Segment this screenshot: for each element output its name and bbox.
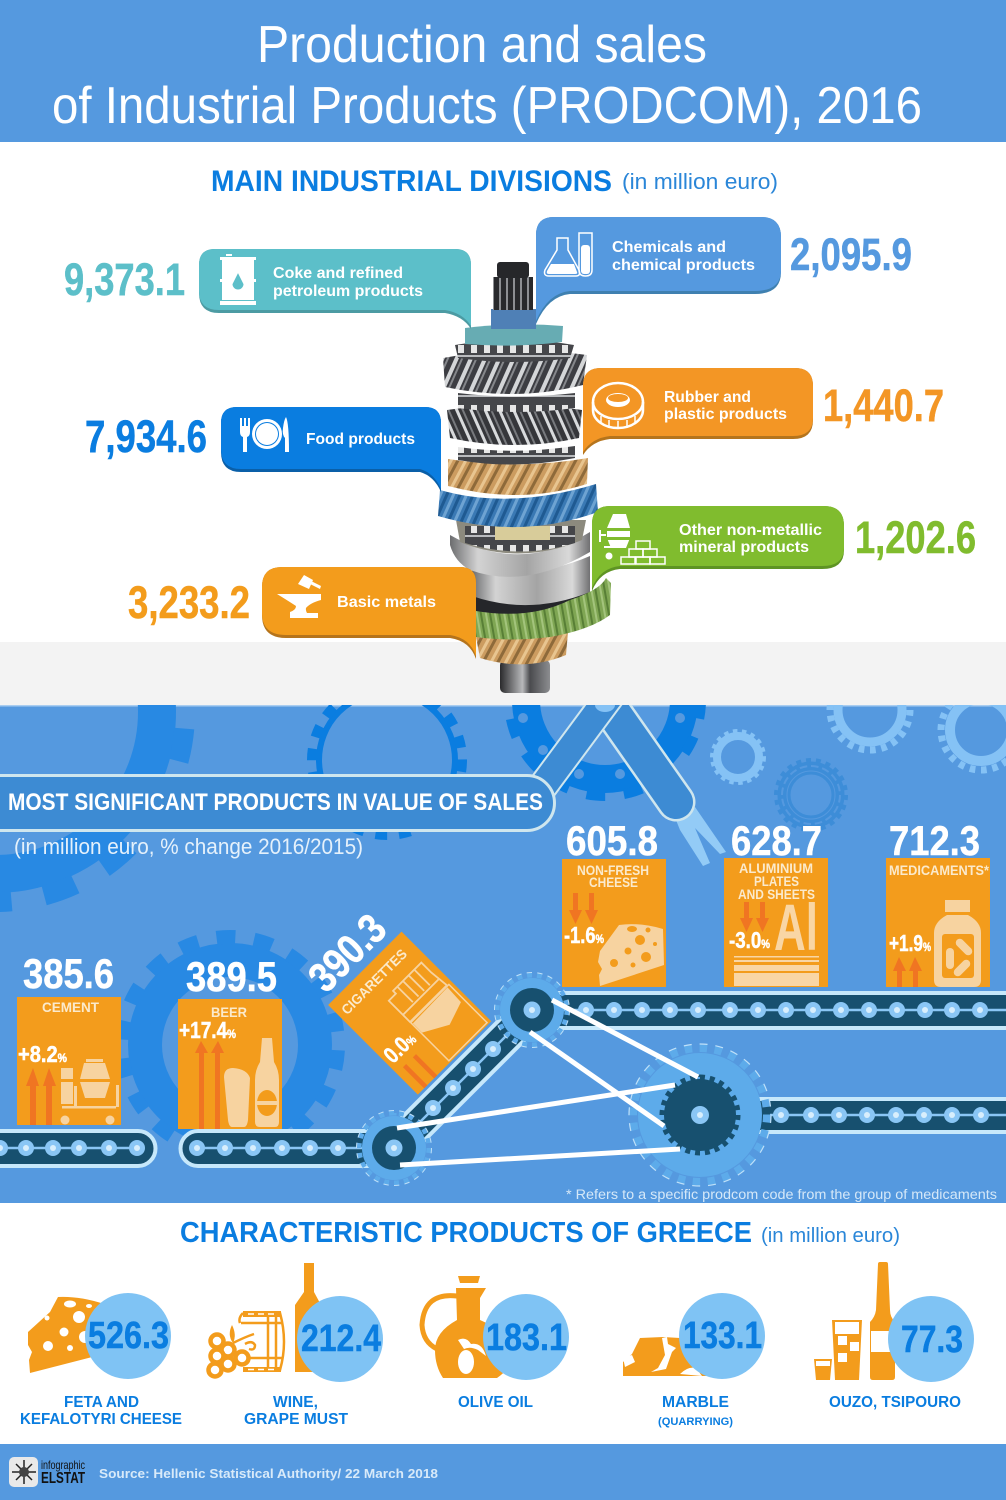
subheading: (in million euro, % change 2016/2015) bbox=[14, 834, 363, 859]
value circle bbox=[888, 1296, 974, 1382]
name: NON-FRESH bbox=[577, 862, 649, 878]
change: +8.2% bbox=[18, 1041, 67, 1067]
qualifier: (QUARRYING) bbox=[658, 1416, 733, 1428]
change: +1.9% bbox=[889, 930, 931, 956]
value: 183.1 bbox=[486, 1317, 567, 1359]
value: 605.8 bbox=[566, 817, 658, 864]
value: basic metals: 3,233.2 bbox=[128, 577, 250, 628]
label: Basic metals bbox=[337, 594, 436, 611]
product box: cigarettes bbox=[309, 914, 492, 1095]
label: Rubber and bbox=[664, 389, 751, 406]
icon: cheese wedge bbox=[28, 1297, 104, 1373]
product box: cement bbox=[17, 950, 121, 1125]
background gear: large top left bbox=[0, 705, 194, 912]
conveyor: left bbox=[0, 1131, 156, 1166]
name: GRAPE MUST bbox=[244, 1411, 348, 1428]
item: feta and kefalotyri cheese bbox=[20, 1293, 182, 1428]
conveyor: lower right bbox=[740, 1099, 1006, 1132]
title: of Industrial Products (PRODCOM), 2016 bbox=[52, 77, 922, 135]
background gear: outlined bbox=[776, 760, 846, 830]
banner heading: MOST SIGNIFICANT PRODUCTS IN VALUE OF SALES bbox=[8, 789, 543, 816]
label: Chemicals and bbox=[612, 239, 726, 256]
logo bbox=[9, 1457, 38, 1487]
icon: aluminium symbol and sheets bbox=[734, 890, 819, 986]
value: 526.3 bbox=[88, 1315, 169, 1357]
heading: characteristic products: (in million euro) bbox=[761, 1225, 900, 1247]
name: ALUMINIUM bbox=[739, 860, 813, 876]
name: OLIVE OIL bbox=[458, 1394, 533, 1411]
name: CEMENT bbox=[42, 999, 99, 1015]
background gear: behind robot arm bbox=[506, 705, 706, 801]
value: 389.5 bbox=[186, 953, 277, 1000]
logo text bbox=[41, 1458, 85, 1487]
value: coke: 9,373.1 bbox=[64, 254, 185, 305]
item: marble bbox=[623, 1293, 765, 1428]
icon: concrete mixer bbox=[60, 1059, 119, 1124]
title: Production and sales bbox=[257, 16, 707, 74]
label: chemical products bbox=[612, 257, 755, 274]
icon: rubber ring bbox=[593, 383, 643, 428]
arrows up bbox=[26, 1068, 56, 1125]
name: MARBLE bbox=[662, 1394, 729, 1411]
icon: bottle, barrel, grapes bbox=[208, 1263, 321, 1376]
icon: cheese bbox=[598, 924, 664, 986]
value: 212.4 bbox=[301, 1318, 381, 1360]
value circle bbox=[85, 1293, 171, 1379]
arrows up bbox=[893, 957, 922, 987]
grey floor strip bbox=[0, 642, 1006, 705]
gear shaft illustration bbox=[438, 262, 611, 693]
conveyor: middle bbox=[181, 1131, 394, 1166]
label: Coke and refined bbox=[273, 265, 403, 282]
value: 385.6 bbox=[23, 950, 114, 997]
label: Food products bbox=[306, 431, 415, 448]
product box: aluminium bbox=[724, 817, 828, 987]
background gear: top centre bbox=[312, 685, 462, 835]
icon: aluminium symbol and sheets: Al bbox=[774, 890, 818, 964]
item: ouzo, tsipouro bbox=[814, 1262, 974, 1411]
value circle bbox=[679, 1293, 765, 1379]
name: FETA AND bbox=[64, 1394, 139, 1411]
name: WINE, bbox=[273, 1394, 318, 1411]
logo text: infographic bbox=[41, 1458, 85, 1472]
item: olive oil bbox=[422, 1276, 569, 1411]
background gear: behind beer bbox=[116, 931, 344, 1159]
name: KEFALOTYRI CHEESE bbox=[20, 1411, 182, 1428]
callout: basic metals bbox=[262, 567, 476, 659]
banner heading bbox=[0, 775, 554, 830]
name: CHEESE bbox=[589, 874, 638, 890]
heading: main industrial divisions: MAIN INDUSTRIAL DIVISIONS bbox=[211, 165, 612, 198]
icon: robot claw bbox=[676, 807, 726, 866]
name: PLATES bbox=[754, 873, 799, 889]
icon: cigarette pack bbox=[386, 960, 487, 1061]
name: AND SHEETS bbox=[738, 886, 815, 902]
arrows neutral bbox=[403, 1054, 439, 1090]
heading: main industrial divisions: (in million euro) bbox=[622, 169, 778, 194]
arrows down bbox=[569, 893, 598, 924]
icon: mixer and bricks bbox=[600, 514, 665, 564]
conveyor: diagonal bbox=[400, 1016, 526, 1142]
icon: oil jug bbox=[422, 1276, 514, 1378]
pulley: lower left bbox=[356, 1110, 432, 1186]
label: Other non-metallic bbox=[679, 522, 822, 539]
label: petroleum products bbox=[273, 283, 423, 300]
panel: most significant products bbox=[0, 705, 1006, 1203]
icon: marble block bbox=[623, 1337, 710, 1376]
callout: coke and refined petroleum bbox=[199, 249, 471, 329]
footer band bbox=[0, 1444, 1006, 1500]
icon: pill bottle bbox=[934, 900, 981, 987]
heading: characteristic products: CHARACTERISTIC PRODUCTS OF GREECE bbox=[180, 1217, 752, 1249]
change: -3.0% bbox=[729, 927, 770, 953]
logo text: ELSTAT bbox=[41, 1470, 85, 1487]
conveyor: upper right bbox=[540, 993, 1006, 1028]
value: food: 7,934.6 bbox=[85, 411, 207, 462]
header band bbox=[0, 0, 1006, 142]
value: 390.3 bbox=[299, 905, 395, 1001]
change: 0.0% bbox=[378, 1025, 421, 1068]
source: Source: Hellenic Statistical Authority/ 22 March 2018 bbox=[99, 1466, 438, 1481]
product box: medicaments bbox=[886, 817, 990, 987]
icon: plate and cutlery bbox=[240, 417, 289, 452]
robot arm right bbox=[594, 685, 676, 802]
icon: anvil and hammer bbox=[277, 575, 321, 618]
change: -1.6% bbox=[564, 922, 604, 948]
name: BEER bbox=[211, 1004, 247, 1020]
footnote: * Refers to a specific prodcom code from the group of medicaments bbox=[566, 1187, 997, 1202]
robot arm pivot bbox=[595, 705, 615, 712]
label: mineral products bbox=[679, 539, 809, 556]
name: MEDICAMENTS* bbox=[889, 862, 990, 878]
arrows up bbox=[195, 1041, 224, 1129]
icon: flask and test tube bbox=[544, 233, 592, 276]
value: 628.7 bbox=[731, 817, 822, 864]
name: OUZO, TSIPOURO bbox=[829, 1394, 961, 1411]
arrows down bbox=[740, 902, 769, 932]
icon: bottle and glasses bbox=[814, 1262, 895, 1380]
change: +17.4% bbox=[179, 1017, 236, 1043]
value: rubber: 1,440.7 bbox=[823, 380, 944, 431]
icon: beer glass and bottle bbox=[224, 1038, 279, 1127]
value: 712.3 bbox=[889, 817, 980, 864]
background gear: top right bbox=[826, 705, 914, 754]
callout: other non-metallic bbox=[592, 506, 844, 591]
callout: chemicals bbox=[536, 217, 781, 324]
value circle bbox=[483, 1294, 569, 1380]
product box: non-fresh cheese bbox=[562, 817, 666, 987]
name: CIGARETTES bbox=[338, 946, 410, 1018]
large drive gear bbox=[629, 1044, 771, 1186]
icon: oil barrel bbox=[220, 254, 256, 305]
value: chemicals: 2,095.9 bbox=[790, 229, 912, 280]
drive belts bbox=[397, 1000, 698, 1165]
pulley: upper bbox=[494, 972, 570, 1048]
background gear: small light bbox=[712, 731, 764, 783]
item: wine, grape must bbox=[208, 1263, 383, 1428]
product box: beer bbox=[178, 953, 282, 1129]
value: 77.3 bbox=[901, 1319, 963, 1361]
callout: rubber and plastic bbox=[583, 368, 813, 455]
value circle bbox=[297, 1296, 383, 1382]
value: 133.1 bbox=[683, 1315, 762, 1357]
value: non-metallic: 1,202.6 bbox=[855, 512, 976, 563]
robot arm left bbox=[532, 705, 622, 796]
callout: food products bbox=[221, 407, 441, 492]
label: plastic products bbox=[664, 406, 787, 423]
background gear: far right bbox=[941, 690, 1006, 770]
